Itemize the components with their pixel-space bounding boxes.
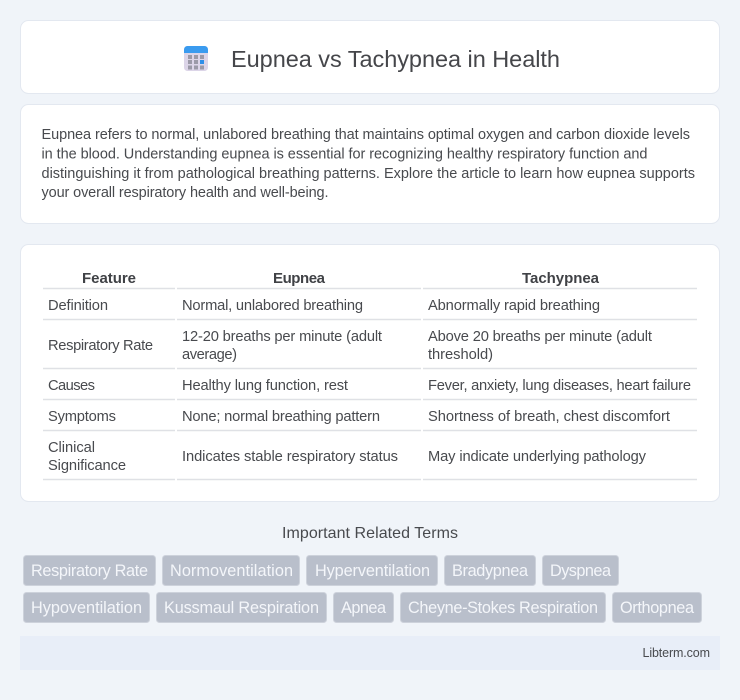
tag: Dyspnea [542, 556, 618, 586]
row: respiratory rate: threshold) [428, 347, 493, 363]
intro text: distinguishing it from pathological breathing patterns. Explore the article to learn how eupnea supports [42, 166, 695, 182]
tag: Apnea [334, 592, 394, 622]
panel: intro [20, 104, 720, 224]
row: definition: Definition [48, 298, 108, 314]
footer [20, 636, 720, 670]
tag: Hypoventilation: Hypoventilation [31, 599, 142, 617]
tag: Apnea: Apnea [341, 599, 387, 617]
tag: Normoventilation [162, 556, 300, 586]
row: respiratory rate [48, 329, 652, 363]
table header: Eupnea [273, 270, 326, 287]
intro text [42, 127, 695, 201]
row: respiratory rate: average) [182, 347, 237, 363]
table header: Tachypnea [522, 270, 600, 287]
intro text: Eupnea refers to normal, unlabored breathing that maintains optimal oxygen and carbon dioxide levels [42, 127, 690, 143]
heading: related terms: Important Related Terms [282, 525, 458, 542]
row: symptoms: Symptoms [48, 409, 116, 425]
row: respiratory rate: 12-20 breaths per minute (adult [182, 329, 382, 345]
row: symptoms: None; normal breathing pattern [182, 409, 380, 425]
panel: comparison table [20, 244, 720, 502]
row: causes: Healthy lung function, rest [182, 378, 348, 394]
tag: Respiratory Rate: Respiratory Rate [31, 562, 148, 580]
related term tags [24, 556, 702, 622]
intro text: in the blood. Understanding eupnea is essential for recognizing healthy respiratory function and [42, 146, 648, 162]
tag: Normoventilation: Normoventilation [170, 562, 293, 580]
tag: Orthopnea [612, 592, 702, 622]
row: causes: Causes [48, 378, 95, 394]
tag: Bradypnea [444, 556, 536, 586]
tag: Kussmaul Respiration: Kussmaul Respiration [164, 599, 319, 617]
row: causes [48, 378, 691, 394]
row: clinical significance: Clinical [48, 440, 95, 456]
tag: Bradypnea: Bradypnea [452, 562, 529, 580]
row: respiratory rate: Respiratory Rate [48, 338, 153, 354]
tag: Kussmaul Respiration [156, 592, 326, 622]
table header: Feature [82, 270, 136, 287]
row: causes: Fever, anxiety, lung diseases, heart failure [428, 378, 691, 394]
tag: Cheyne-Stokes Respiration: Cheyne-Stokes Respiration [408, 599, 598, 617]
row: symptoms: Shortness of breath, chest discomfort [428, 409, 670, 425]
tag: Hyperventilation: Hyperventilation [315, 562, 430, 580]
row: definition [48, 298, 600, 314]
title: Eupnea vs Tachypnea in Health [231, 46, 560, 72]
footer credit: Libterm.com [642, 646, 710, 660]
tag: Orthopnea: Orthopnea [620, 599, 695, 617]
tag: Cheyne-Stokes Respiration [400, 592, 606, 622]
panel: header [20, 20, 720, 94]
row: symptoms [48, 409, 670, 425]
row: clinical significance: Significance [48, 458, 126, 474]
icon: calendar [184, 46, 208, 71]
row: clinical significance [48, 440, 647, 474]
tag: Hypoventilation [24, 592, 150, 622]
row: clinical significance: May indicate underlying pathology [428, 449, 647, 465]
row: definition: Normal, unlabored breathing [182, 298, 363, 314]
tag: Dyspnea: Dyspnea [550, 562, 612, 580]
tag: Respiratory Rate [24, 556, 156, 586]
table header [82, 270, 600, 287]
row: clinical significance: Indicates stable respiratory status [182, 449, 398, 465]
intro text: your overall respiratory health and well-being. [42, 185, 328, 201]
row: definition: Abnormally rapid breathing [428, 298, 600, 314]
tag: Hyperventilation [306, 556, 438, 586]
row: respiratory rate: Above 20 breaths per minute (adult [428, 329, 652, 345]
